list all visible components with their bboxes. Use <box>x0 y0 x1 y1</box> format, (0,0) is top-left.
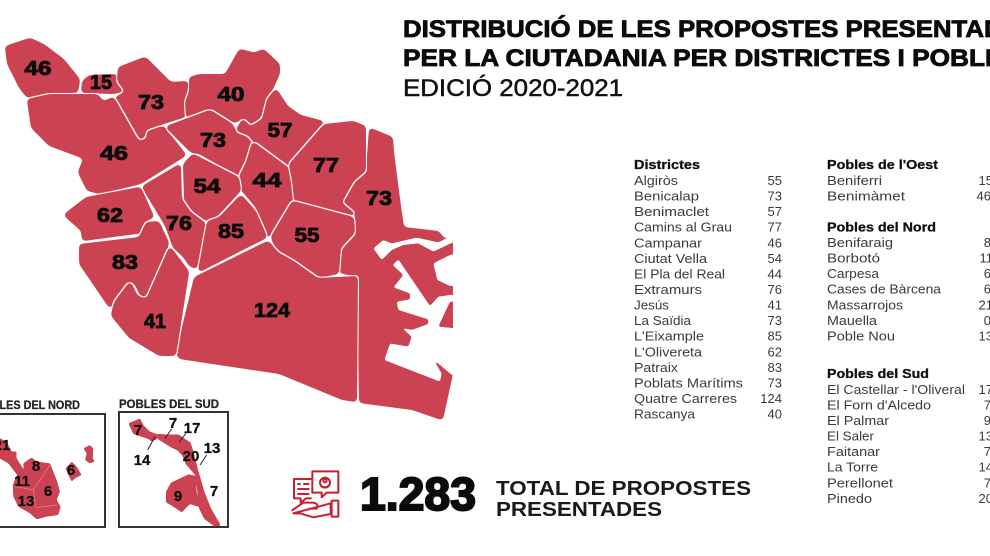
inset: pobles del sud: 17 <box>184 420 200 437</box>
list: pobles de l'oest: Pobles de l'Oest <box>827 157 939 172</box>
list: districtes: 55 <box>768 173 782 188</box>
list: pobles del sud: El Palmar <box>827 413 890 428</box>
list: pobles de l'oest: Benimàmet <box>827 189 905 204</box>
list: districtes: 41 <box>768 298 782 313</box>
list: districtes: Algiròs <box>634 173 679 188</box>
list: pobles del sud: Faitanar <box>827 444 881 459</box>
list: pobles del nord: Benifaraig <box>827 235 893 250</box>
list: districtes: 83 <box>768 360 782 375</box>
list: pobles del nord <box>827 220 990 343</box>
district: El Pla del Real 44: 44 <box>252 170 283 192</box>
list: pobles del nord: Cases de Bàrcena <box>827 282 942 297</box>
list: districtes: Campanar <box>634 235 703 250</box>
district: Rascanya 40 <box>186 50 279 126</box>
list: districtes: Districtes <box>634 157 700 172</box>
list: districtes: El Pla del Real <box>634 266 725 281</box>
district: Quatre Carreres 124 <box>177 242 357 401</box>
district: Benimàmet 46 <box>6 39 79 97</box>
list: districtes: 57 <box>768 204 782 219</box>
list: districtes: Camins al Grau <box>634 220 732 235</box>
district: Campanar 46: 46 <box>100 143 128 165</box>
district: Beniferri 15 <box>82 72 126 94</box>
list: districtes: 73 <box>768 313 782 328</box>
inset: pobles del sud: 7 <box>210 483 218 500</box>
total label: PRESENTADES <box>496 499 662 521</box>
list: districtes: Extramurs <box>634 282 703 297</box>
inset heading: pobles del sud: POBLES DEL SUD <box>119 399 219 411</box>
district: Patraix 83 <box>80 222 168 307</box>
list: districtes: 85 <box>768 329 782 344</box>
list: districtes: 62 <box>768 344 782 359</box>
district: L'Olivereta 62 <box>65 188 153 240</box>
inset: pobles del sud: 20 <box>183 448 199 465</box>
list: districtes: 46 <box>768 235 782 250</box>
total number: 1.283 <box>360 468 476 520</box>
map of districts <box>6 39 457 419</box>
district: Jesús 41 <box>112 248 188 355</box>
list: districtes: 44 <box>768 266 782 281</box>
district: La Saïdia 73 <box>167 111 252 175</box>
district: Beniferri 15: 15 <box>90 72 112 94</box>
inset: pobles del sud <box>119 412 228 527</box>
district: Poblats Marítims 73 <box>340 129 457 419</box>
list: districtes: Jesús <box>634 298 670 313</box>
district: Campanar 46 <box>28 95 185 193</box>
inset: pobles del nord <box>0 414 105 527</box>
district: Ciutat Vella 54 <box>184 155 240 220</box>
district: Benicalap 73: 73 <box>138 92 164 114</box>
list: pobles del sud: El Forn d'Alcedo <box>827 398 931 412</box>
list: districtes <box>634 157 782 422</box>
list: districtes: 73 <box>768 189 782 204</box>
list: districtes: Rascanya <box>634 406 696 422</box>
list: districtes: Poblats Marítims <box>634 375 744 390</box>
list: districtes: Benimaclet <box>634 204 709 219</box>
district: Camins al Grau 77 <box>290 122 365 215</box>
list: districtes: L'Eixample <box>634 329 704 344</box>
list: districtes: Ciutat Vella <box>634 251 708 266</box>
list: pobles del sud: Pinedo <box>827 491 872 506</box>
list: pobles del sud: Pobles del Sud <box>827 366 929 381</box>
list: pobles del nord: Carpesa <box>827 266 880 281</box>
inset: pobles del nord: 13 <box>18 493 34 510</box>
inset: pobles del sud: 13 <box>204 440 220 457</box>
district: Algiròs 55: 55 <box>294 225 320 247</box>
district: L'Eixample 85: 85 <box>218 221 244 243</box>
list: districtes: Quatre Carreres <box>634 391 738 406</box>
district: Benimàmet 46: 46 <box>24 58 52 80</box>
inset: pobles del sud: 7 <box>169 415 177 432</box>
list: pobles del sud: El Castellar - l'Oliveral <box>827 382 965 397</box>
inset: pobles del sud: 14 <box>134 452 151 469</box>
inset: pobles del sud: 7 <box>134 422 142 439</box>
list: districtes: 77 <box>768 220 782 235</box>
district: Quatre Carreres 124: 124 <box>254 300 291 322</box>
list: pobles del nord: Pobles del Nord <box>827 220 936 234</box>
total label <box>496 478 751 521</box>
total label: TOTAL DE PROPOSTES <box>496 478 751 500</box>
list: pobles del sud: La Torre <box>827 460 878 475</box>
list: pobles del nord: Borbotó <box>827 251 880 266</box>
list: districtes: La Saïdia <box>634 313 692 328</box>
list: districtes: L'Olivereta <box>634 344 703 359</box>
district: La Saïdia 73: 73 <box>200 130 226 152</box>
district: Benicalap 73 <box>116 58 190 139</box>
district: Camins al Grau 77: 77 <box>313 155 339 177</box>
district: Benimaclet 57 <box>237 90 323 165</box>
district: Rascanya 40: 40 <box>218 84 244 106</box>
title <box>403 15 990 102</box>
district: Extramurs 76: 76 <box>166 213 192 235</box>
list: districtes: 124 <box>760 391 782 406</box>
title: EDICIÓ 2020-2021 <box>403 75 623 102</box>
title: PER LA CIUTADANIA PER DISTRICTES I POBLES <box>403 45 990 72</box>
list: districtes: Patraix <box>634 360 679 375</box>
district: Patraix 83: 83 <box>112 252 138 274</box>
list: pobles del sud: El Saler <box>827 429 875 444</box>
list: pobles del nord: Mauella <box>827 313 878 328</box>
district: El Pla del Real 44 <box>240 143 295 237</box>
list: districtes: Benicalap <box>634 189 699 204</box>
district: Jesús 41: 41 <box>144 311 166 333</box>
list: pobles de l'oest: Beniferri <box>827 173 882 188</box>
inset: pobles del nord: 6 <box>67 462 75 479</box>
inset: pobles del nord: 6 <box>44 483 52 500</box>
district: Poblats Marítims 73: 73 <box>366 188 392 210</box>
district: Ciutat Vella 54: 54 <box>194 176 222 198</box>
list: pobles del sud <box>827 366 990 506</box>
district: Extramurs 76 <box>143 165 205 268</box>
district: L'Olivereta 62: 62 <box>97 205 123 227</box>
list: districtes: 54 <box>768 251 782 266</box>
inset: pobles del nord: 11 <box>14 473 30 490</box>
list: districtes: 76 <box>768 282 782 297</box>
district: Benimaclet 57: 57 <box>268 120 292 142</box>
title: DISTRIBUCIÓ DE LES PROPOSTES PRESENTADES <box>403 15 990 43</box>
list: districtes: 40 <box>768 406 782 422</box>
list: pobles de l'oest <box>827 157 990 204</box>
district: L'Eixample 85 <box>199 196 266 271</box>
list: pobles del nord: Massarrojos <box>827 297 904 312</box>
district: Algiròs 55 <box>272 202 354 277</box>
list: pobles del sud: Perellonet <box>827 475 893 490</box>
list: pobles del nord: Poble Nou <box>827 328 895 343</box>
icon: hand with speech bubbles <box>292 471 338 517</box>
list: districtes: 73 <box>768 375 782 390</box>
inset: pobles del nord: 8 <box>32 458 40 475</box>
inset: pobles del sud: 9 <box>174 488 182 505</box>
